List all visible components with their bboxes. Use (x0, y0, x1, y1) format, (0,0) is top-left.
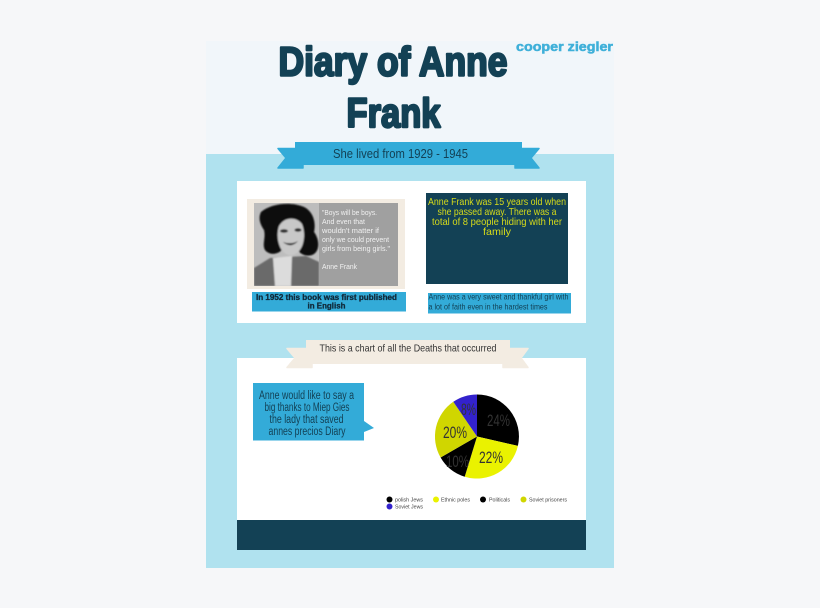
caption: sweet and thankful (428, 292, 571, 314)
chart legend: Politicals (489, 498, 510, 504)
callout: thanks to Miep Gies: the lady that saved (270, 414, 344, 426)
caption: sweet and thankful: Anne was a very sweet and thankful girl with (428, 292, 569, 302)
slice: Soviet Jews 8% (453, 394, 477, 436)
slice: Ethnic poles 22% (465, 436, 518, 479)
panel: top white section (237, 181, 586, 323)
author name: cooper ziegler (516, 40, 613, 54)
banner ribbon (278, 148, 539, 168)
title: Diary of Anne (278, 38, 508, 84)
slice labels: 24% (487, 412, 510, 430)
text box: age facts: family (483, 226, 512, 238)
caption: 1952 publication (252, 292, 406, 312)
slice labels: 10% (446, 453, 469, 471)
slice: Politicals 10% (441, 436, 477, 477)
photo quote frame (247, 199, 405, 289)
banner: life dates (278, 142, 539, 168)
slice labels (443, 401, 510, 471)
footer bar (237, 520, 586, 550)
slice: polish Jews 24% (477, 394, 519, 446)
chart legend: polish Jews (395, 498, 423, 504)
quote text: girls from being girls." (322, 246, 391, 253)
banner text: She lived from 1929 - 1945 (333, 146, 468, 161)
callout: thanks to Miep Gies (253, 383, 374, 440)
callout: thanks to Miep Gies: Anne would like to say a (259, 390, 354, 402)
quote text: wouldn't matter if (321, 228, 379, 235)
quote text: only we could prevent (322, 237, 389, 244)
photo: girl portrait (254, 203, 319, 286)
chart legend: Soviet Jews (395, 504, 423, 510)
title (278, 38, 508, 136)
title: Frank (346, 90, 441, 136)
callout: thanks to Miep Gies: annes precios Diary (268, 426, 346, 438)
caption: 1952 publication: In 1952 this book was first published (256, 293, 397, 302)
callout: thanks to Miep Gies: big thanks to Miep Gies (264, 402, 350, 414)
caption: 1952 publication: in English (308, 302, 346, 310)
poster header background (206, 41, 614, 154)
text box: age facts: total of 8 people hiding with her (432, 216, 562, 228)
quote text: Anne Frank (322, 264, 357, 271)
slice: Soviet prisoners 20% (435, 402, 477, 458)
chart legend: Soviet prisoners (529, 498, 567, 504)
panel: bottom white section (237, 358, 586, 520)
quote text: And even that (322, 219, 365, 226)
banner: chart heading (287, 340, 528, 368)
slice labels: 22% (479, 449, 503, 467)
pie chart (435, 394, 519, 479)
text box: age facts: Anne Frank was 15 years old when (428, 196, 566, 208)
chart legend: Ethnic poles (441, 498, 470, 504)
text box: age facts (426, 193, 568, 284)
heading text: This is a chart of all the Deaths that occurred (320, 342, 497, 354)
quote text (321, 210, 391, 271)
chart legend (386, 496, 567, 510)
slice labels: 20% (443, 424, 467, 442)
caption: sweet and thankful: a lot of faith even in the hardest times (428, 302, 548, 312)
heading ribbon (287, 348, 528, 368)
poster body background (206, 154, 614, 568)
text box: age facts: she passed away. There was a (438, 206, 557, 218)
slice labels: 8% (461, 401, 476, 419)
quote text: "Boys will be boys. (322, 210, 377, 217)
